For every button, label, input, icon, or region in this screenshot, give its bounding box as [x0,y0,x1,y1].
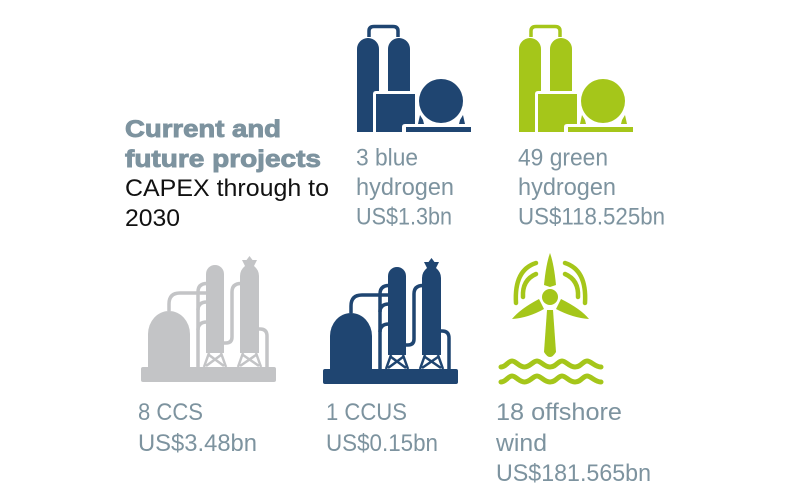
label: 3 blue hydrogen [356,144,454,230]
label: 49 green hydrogen: hydrogen [518,174,616,201]
label: 18 offshore wind: US$181.565bn [496,460,651,487]
icon: CCUS plant [323,258,458,384]
label: 18 offshore wind: wind [495,430,547,457]
label: 1 CCUS: 1 CCUS [326,399,407,426]
label: 49 green hydrogen: US$118.525bn [518,204,665,230]
label: 3 blue hydrogen: hydrogen [356,174,454,201]
intro heading [125,116,329,232]
icon: offshore wind turbine [501,253,601,382]
label: 8 CCS: US$3.48bn [138,430,257,457]
icon: green hydrogen plant [519,26,633,132]
label: 8 CCS: 8 CCS [138,399,203,426]
label: 18 offshore wind [495,399,651,487]
intro heading: CAPEX through to [125,175,329,202]
label: 49 green hydrogen: 49 green [518,144,608,172]
label: 1 CCUS [326,399,438,457]
intro heading: future projects [125,146,321,173]
label: 3 blue hydrogen: 3 blue [356,144,418,172]
intro heading: 2030 [125,205,180,232]
icon: CCS plant [141,256,276,382]
label: 18 offshore wind: 18 offshore [496,399,622,426]
label: 1 CCUS: US$0.15bn [326,430,438,457]
icon: blue hydrogen plant [357,26,471,132]
intro heading: Current and [125,116,281,143]
label: 49 green hydrogen [518,144,665,230]
label: 8 CCS [138,399,257,457]
label: 3 blue hydrogen: US$1.3bn [356,204,452,230]
